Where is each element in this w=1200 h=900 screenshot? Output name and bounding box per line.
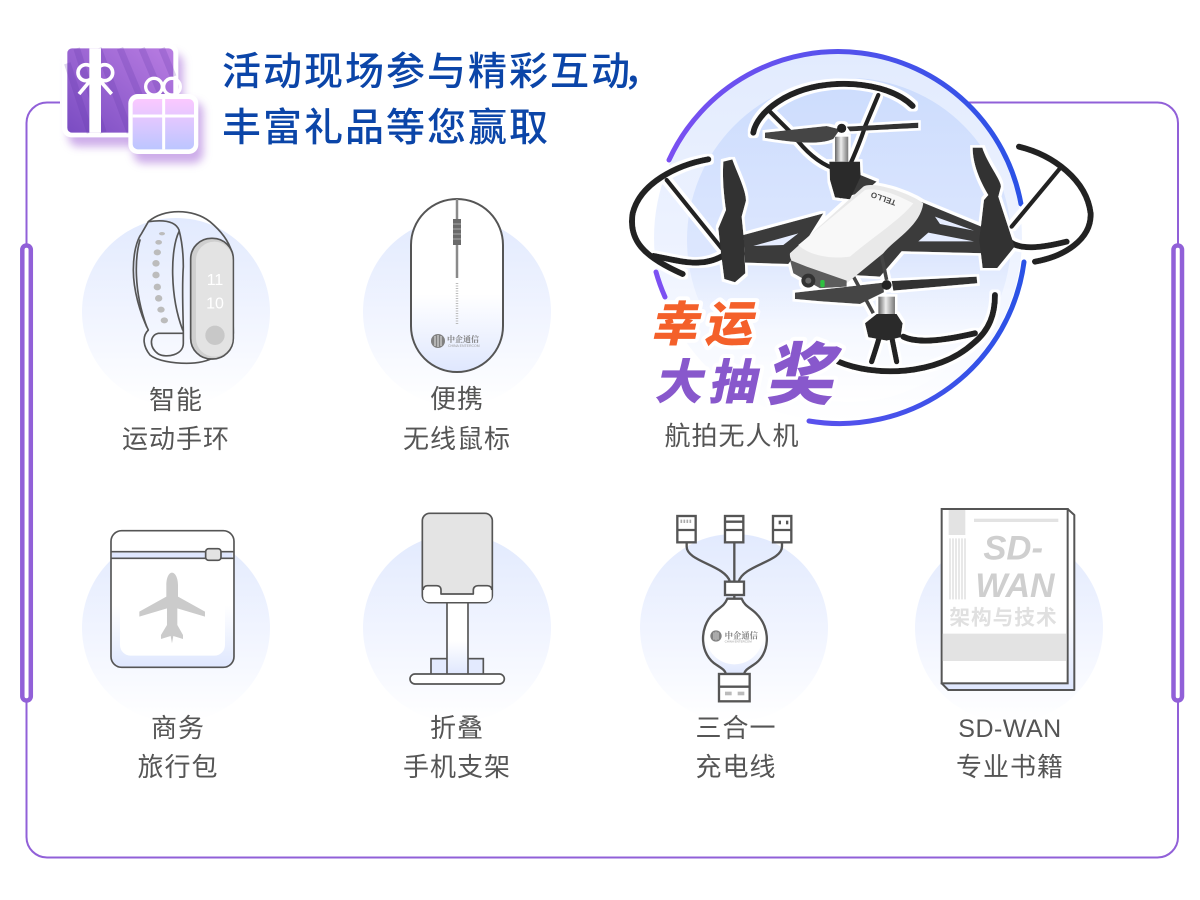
label — [403, 384, 511, 454]
icon: stand — [410, 513, 504, 684]
lucky draw circle — [654, 52, 1024, 424]
prize: smart band — [82, 212, 270, 454]
title: 丰富礼品等您赢取 — [222, 107, 550, 150]
prize: charging cable — [640, 516, 828, 782]
title: 活动现场参与精彩互动， — [222, 51, 664, 94]
label: 运动手环 — [122, 424, 230, 454]
icon: drone: TELLO — [870, 190, 897, 207]
icon: book: 架构与技术 — [949, 606, 1058, 629]
icon: book: SD- — [983, 529, 1043, 567]
icon: drone — [632, 84, 1091, 371]
lucky draw headline: 幸运 — [648, 298, 767, 352]
label: 折叠 — [430, 713, 484, 743]
icon: mouse: CHINA ENTERCOM — [448, 344, 480, 348]
prize: phone stand — [363, 513, 551, 782]
icon: mouse — [411, 199, 503, 372]
icon: smart band: 10 — [206, 296, 224, 313]
label — [956, 715, 1064, 782]
icon: cable: CHINA ENTERCOM — [725, 640, 752, 644]
lucky draw headline — [648, 298, 846, 414]
prize: travel bag — [82, 531, 270, 782]
label: 商务 — [151, 713, 205, 743]
icon: smart band: 11 — [207, 272, 223, 289]
label: 专业书籍 — [956, 752, 1064, 782]
label: 航拍无人机 — [664, 421, 800, 451]
prize: SD-WAN book — [915, 509, 1103, 782]
label: SD-WAN — [958, 715, 1062, 743]
label: 手机支架 — [403, 752, 511, 782]
icon: book — [942, 509, 1074, 690]
label — [122, 385, 230, 454]
icon: cable: 中企通信 — [725, 630, 759, 640]
icon: gift boxes — [62, 43, 203, 163]
prize: wireless mouse — [363, 199, 551, 454]
icon: book: WAN — [975, 567, 1056, 605]
icon: mouse: 中企通信 — [447, 334, 479, 344]
label: 便携 — [430, 384, 484, 414]
icon: smart band — [133, 212, 233, 363]
label: 充电线 — [695, 752, 777, 782]
icon: bag — [111, 531, 234, 667]
label — [403, 713, 511, 782]
lucky draw headline: 奖 — [762, 338, 846, 414]
label — [695, 713, 777, 782]
lucky draw headline: 大抽 — [652, 356, 771, 410]
icon: cable — [677, 516, 791, 701]
label: 智能 — [149, 385, 203, 415]
label: 旅行包 — [137, 752, 219, 782]
label: 三合一 — [695, 713, 777, 743]
label: 无线鼠标 — [403, 424, 511, 454]
prize: drone — [632, 52, 1091, 451]
title — [222, 51, 664, 150]
label — [137, 713, 219, 782]
